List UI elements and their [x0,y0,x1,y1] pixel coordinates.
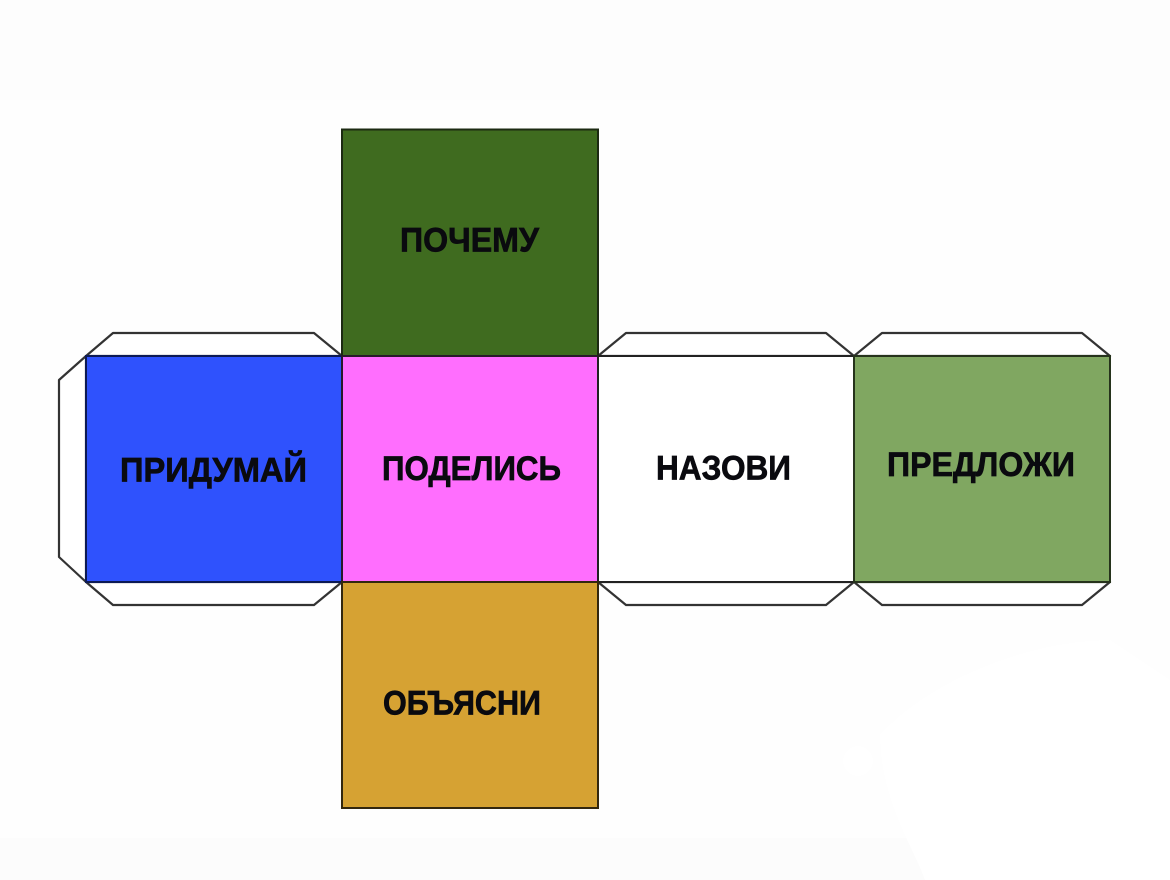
face: ПОЧЕМУ [342,130,598,356]
tab: green bottom [854,582,1110,605]
face: ПРИДУМАЙ: ПРИДУМАЙ [120,450,307,490]
face: ПОДЕЛИСЬ [342,356,598,582]
tab: white top [598,333,854,356]
face: ПРЕДЛОЖИ: ПРЕДЛОЖИ [887,446,1075,484]
tab: green top [854,333,1110,356]
face: ПРИДУМАЙ [86,356,342,582]
tab: blue top [86,333,342,356]
tab: white bottom [598,582,854,605]
glue tabs of the cube net [59,333,1110,605]
face: ПОЧЕМУ: ПОЧЕМУ [400,222,540,260]
face: НАЗОВИ [598,356,854,582]
face: ПОДЕЛИСЬ: ПОДЕЛИСЬ [382,450,561,488]
tab: blue bottom [86,582,342,605]
face: НАЗОВИ: НАЗОВИ [656,450,791,488]
face: ОБЪЯСНИ [342,582,598,808]
tab: left [59,356,86,582]
face: ПРЕДЛОЖИ [854,356,1110,582]
face: ОБЪЯСНИ: ОБЪЯСНИ [383,684,541,722]
